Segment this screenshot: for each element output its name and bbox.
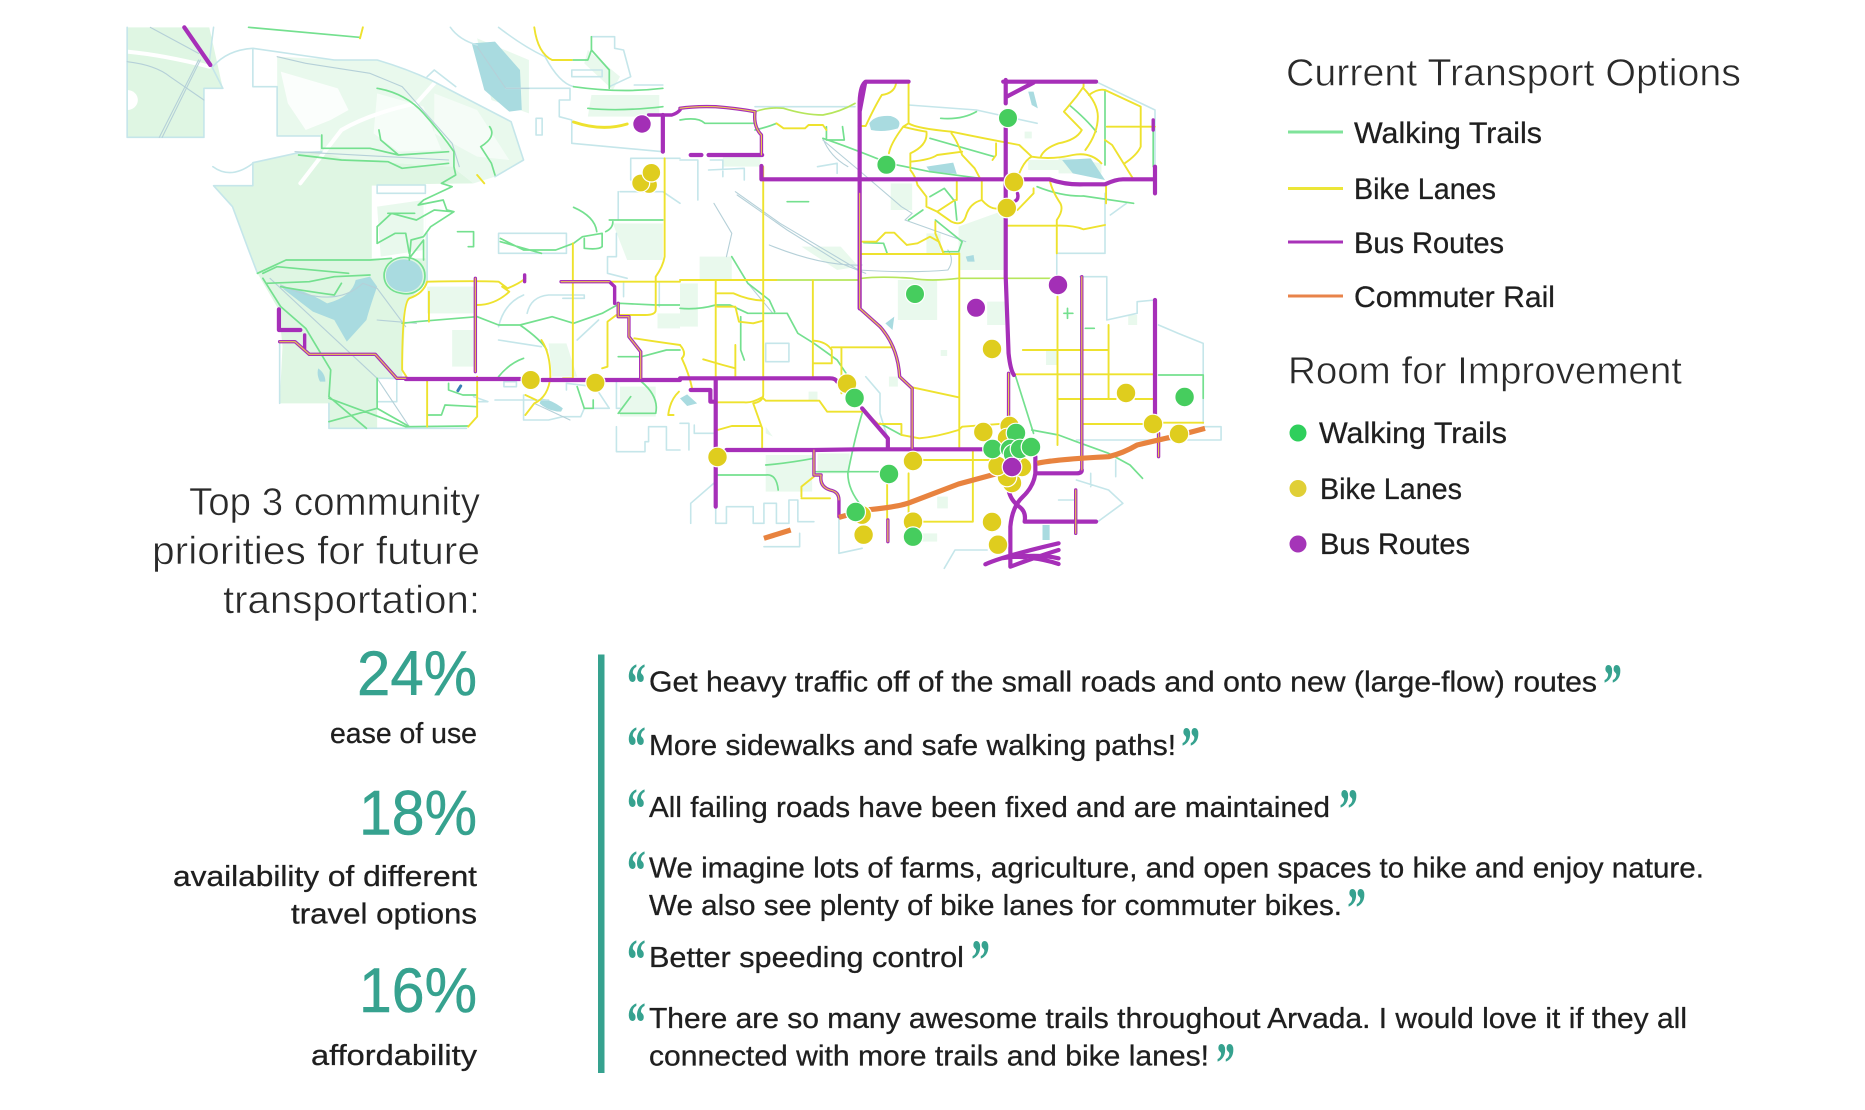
quote 6 bbox=[625, 990, 1687, 1096]
stat: 24 percent: 24% bbox=[357, 639, 477, 709]
bike lanes east bbox=[680, 82, 1203, 522]
quote 4: “ bbox=[625, 838, 645, 903]
stat: 18 percent bbox=[173, 778, 477, 930]
priorities heading: Top 3 community bbox=[189, 481, 480, 524]
quote 4: We also see plenty of bike lanes for commuter bikes. bbox=[649, 890, 1342, 922]
quote 3: All failing roads have been fixed and are maintained bbox=[649, 792, 1330, 824]
quote 1 bbox=[625, 651, 1621, 717]
improvement markers bbox=[521, 108, 1194, 555]
legend item: bus routes: Bus Routes bbox=[1354, 227, 1504, 260]
quote 6: There are so many awesome trails throughout Arvada. I would love it if they all bbox=[649, 1003, 1687, 1035]
stat: 16 percent bbox=[311, 956, 478, 1072]
quote 2: ” bbox=[1179, 715, 1199, 780]
boundaries west bbox=[127, 27, 680, 452]
improvement item: bus routes: Bus Routes bbox=[1320, 528, 1470, 561]
legend heading: Current Transport Options bbox=[1286, 52, 1741, 94]
quote 5: ” bbox=[969, 928, 989, 993]
quote 3: ” bbox=[1337, 777, 1357, 842]
legend item: bike lanes: Bike Lanes bbox=[1354, 173, 1496, 206]
stat: 18 percent: travel options bbox=[291, 898, 477, 930]
improvement item: walking trails: Walking Trails bbox=[1319, 417, 1507, 450]
lakes west bbox=[282, 42, 563, 412]
quote 5: Better speeding control bbox=[649, 942, 964, 974]
quote 6: “ bbox=[625, 990, 645, 1055]
quote 4: We imagine lots of farms, agriculture, and open spaces to hike and enjoy nature. bbox=[649, 853, 1704, 885]
legend item: walking trails: Walking Trails bbox=[1354, 117, 1542, 150]
park areas west bbox=[127, 27, 680, 428]
improvement item: bike lanes: Bike Lanes bbox=[1320, 473, 1462, 506]
legend: room for improvement bbox=[1288, 350, 1682, 561]
quote 2: More sidewalks and safe walking paths! bbox=[649, 730, 1176, 762]
stat: 16 percent: affordability bbox=[311, 1040, 478, 1072]
map east half bbox=[680, 80, 1221, 568]
quote 5: “ bbox=[625, 927, 645, 992]
quote 6: connected with more trails and bike lanes! bbox=[649, 1041, 1209, 1073]
quote 1: Get heavy traffic off of the small roads and onto new (large-flow) routes bbox=[649, 667, 1597, 699]
walking trails east bbox=[680, 90, 1203, 507]
stat: 18 percent: availability of different bbox=[173, 861, 477, 893]
walking trails west bbox=[249, 27, 680, 428]
quote 1: “ bbox=[625, 651, 645, 716]
quote 3: “ bbox=[625, 776, 645, 841]
priorities heading: priorities for future bbox=[152, 530, 480, 573]
quote 4: ” bbox=[1345, 876, 1365, 941]
priorities heading: transportation: bbox=[223, 579, 480, 622]
quote 1: ” bbox=[1601, 652, 1621, 717]
legend: current transport options bbox=[1286, 52, 1741, 314]
bus routes west bbox=[184, 27, 680, 380]
lakes east bbox=[680, 92, 1105, 540]
bus routes east bbox=[680, 80, 1159, 567]
quote 6: ” bbox=[1214, 1031, 1234, 1096]
bike lanes west bbox=[360, 27, 680, 427]
improvement heading: Room for Improvement bbox=[1288, 350, 1682, 392]
stat: 18 percent: 18% bbox=[359, 778, 477, 848]
stat: 24 percent bbox=[330, 639, 477, 750]
quote 4 bbox=[625, 838, 1704, 941]
park areas east bbox=[680, 132, 1137, 542]
quote 2: “ bbox=[625, 714, 645, 779]
legend item: commuter rail: Commuter Rail bbox=[1354, 281, 1555, 314]
panel: resident quotes bbox=[598, 651, 1704, 1096]
quote 3 bbox=[625, 776, 1357, 842]
panel: community priorities bbox=[152, 481, 480, 1072]
quote divider bar bbox=[598, 654, 604, 1073]
legend item: bike lanes bbox=[1288, 173, 1496, 206]
map of transport network bbox=[127, 27, 1221, 568]
boundaries east bbox=[680, 82, 1221, 568]
map west half bbox=[127, 27, 680, 452]
quote 2 bbox=[625, 714, 1199, 780]
legend item: bus routes bbox=[1288, 227, 1504, 260]
quote 5 bbox=[625, 927, 989, 993]
commuter rail bbox=[764, 428, 1205, 538]
stat: 24 percent: ease of use bbox=[330, 718, 477, 750]
stat: 16 percent: 16% bbox=[359, 956, 477, 1026]
